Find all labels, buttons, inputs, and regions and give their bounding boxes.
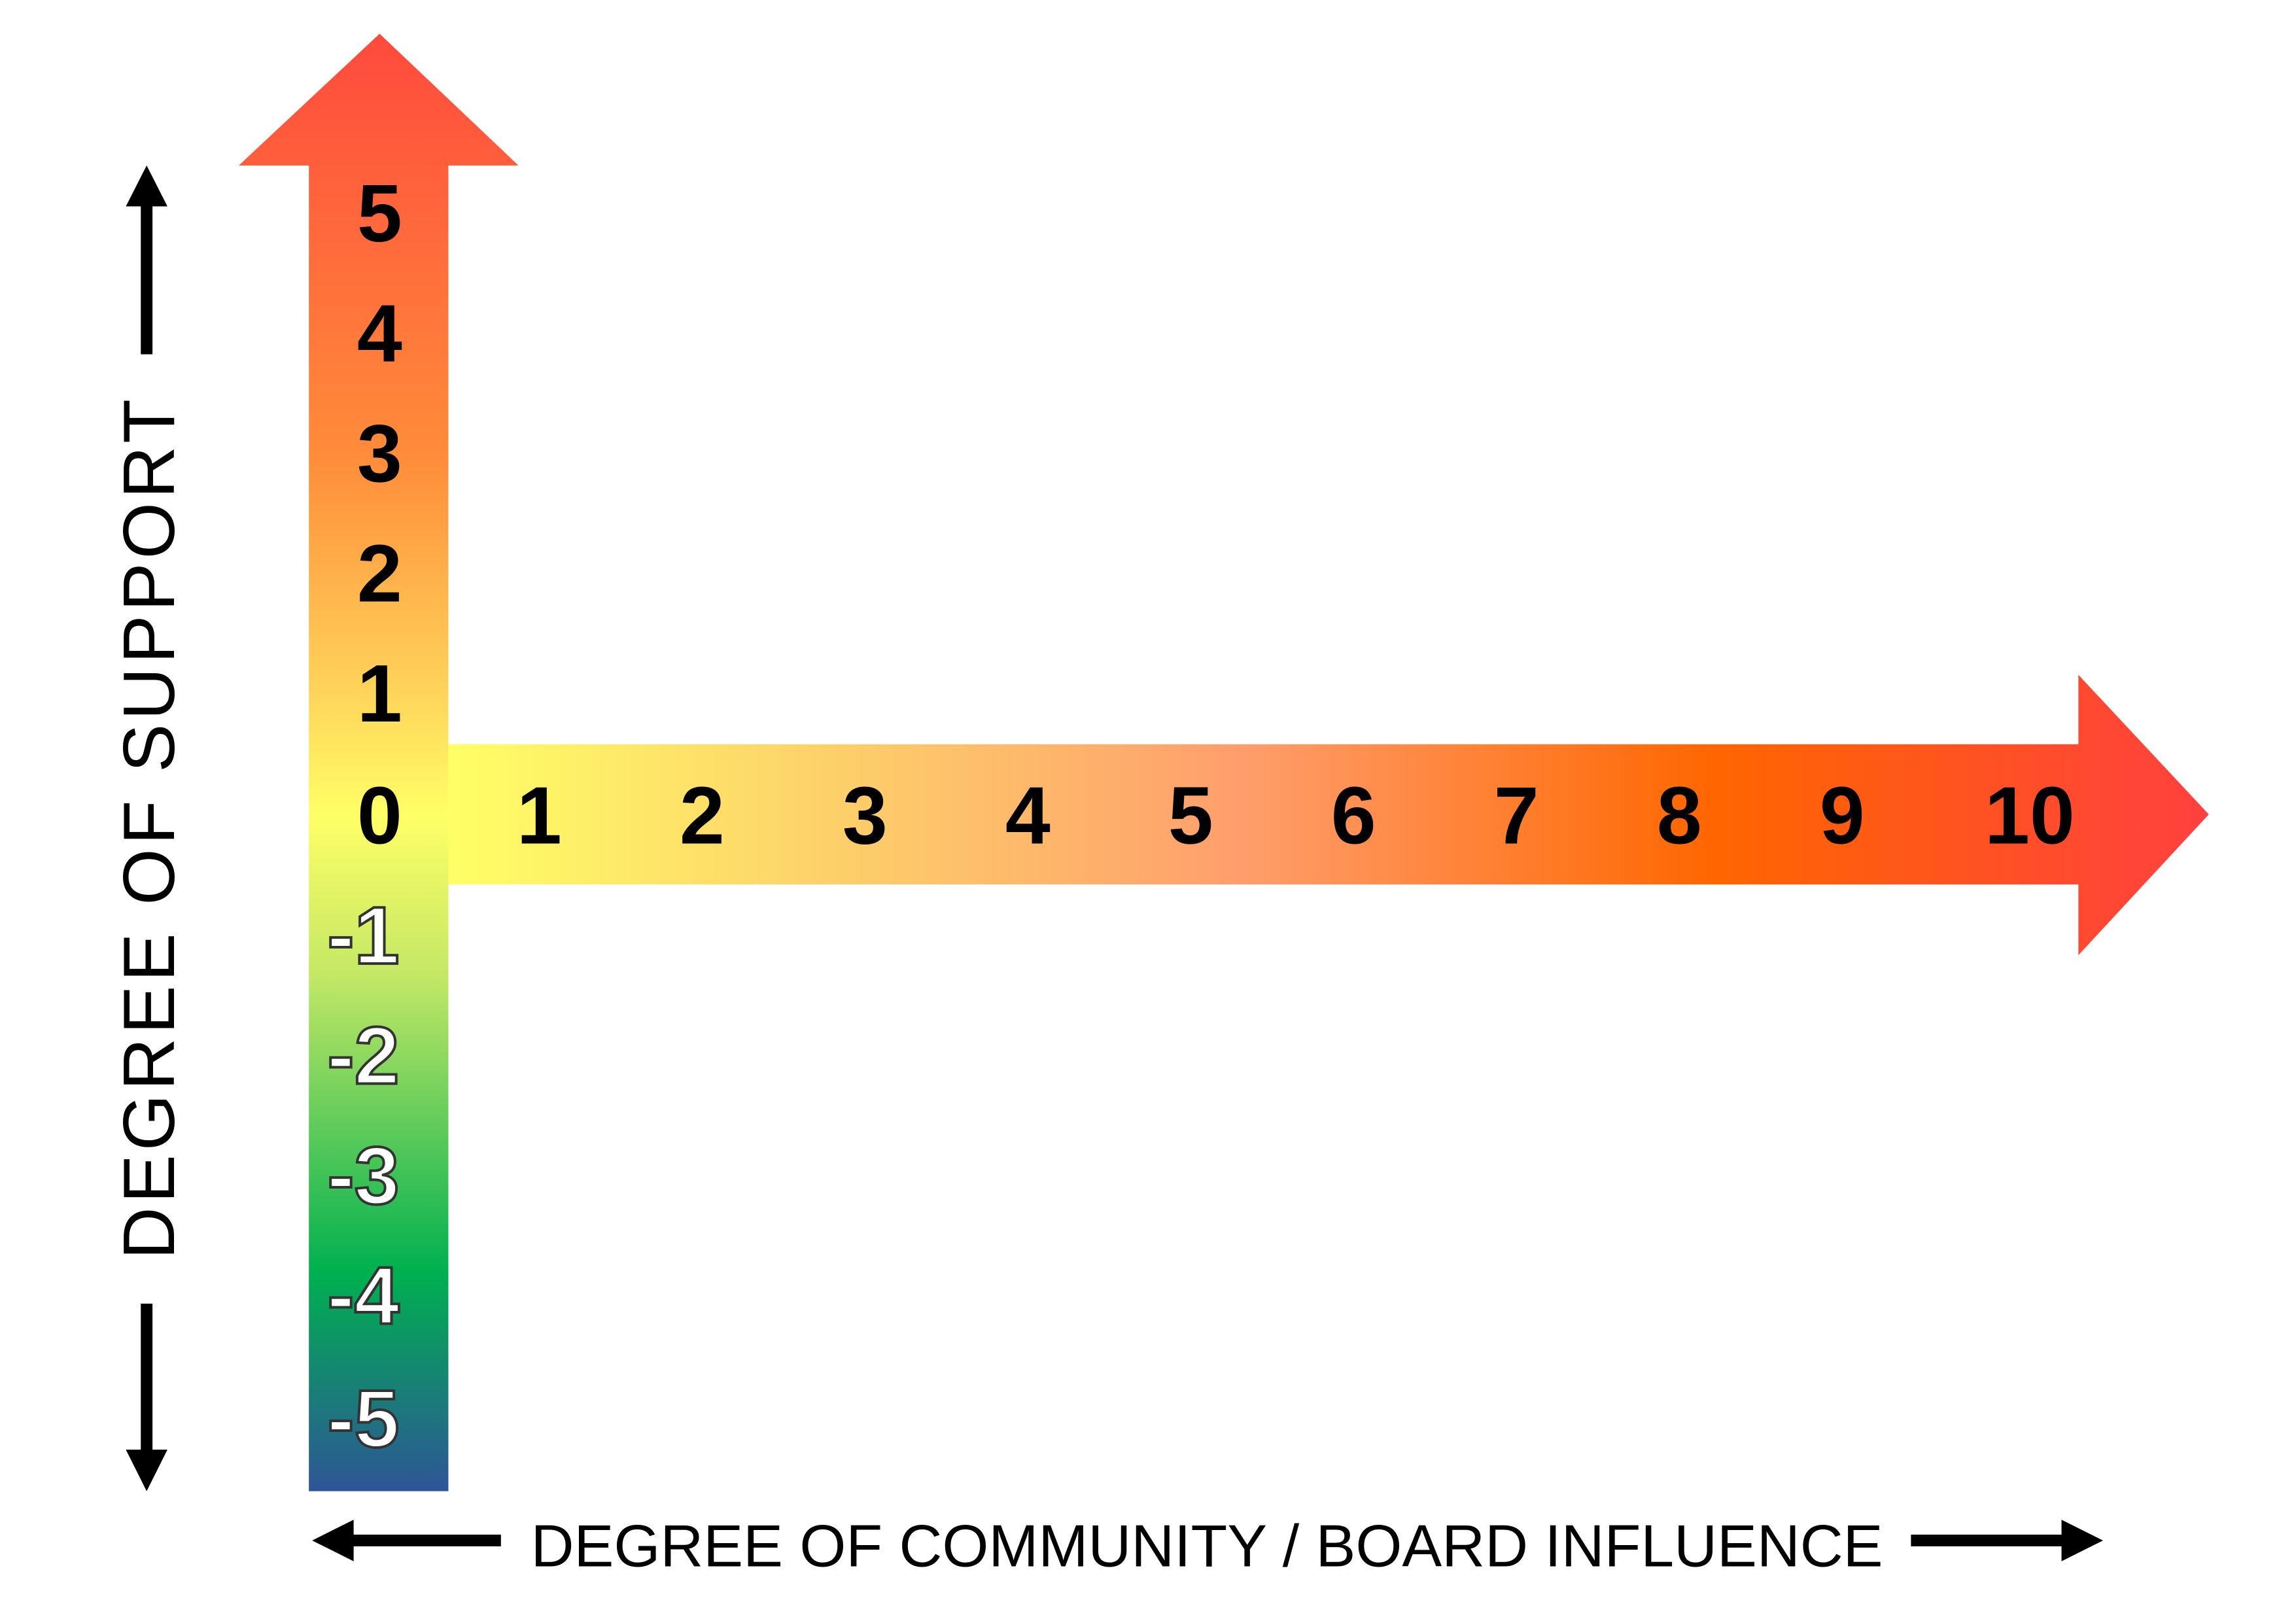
vertical scale numbers positive: 2 [357,529,402,619]
horizontal scale numbers: 2 [680,771,725,862]
vertical scale numbers negative: -2 [327,1011,400,1102]
horizontal scale numbers: 6 [1331,771,1376,862]
horizontal scale numbers: 10 [1985,771,2075,862]
y-axis label with arrows: DEGREE OF SUPPORT [108,395,190,1259]
x-axis label with arrows: DEGREE OF COMMUNITY / BOARD INFLUENCE [531,1513,1883,1580]
horizontal scale numbers: 5 [1168,771,1213,862]
vertical scale numbers negative [327,891,400,1465]
vertical scale numbers negative: -4 [327,1251,400,1342]
horizontal scale numbers [517,771,2075,862]
vertical scale numbers negative: -5 [327,1374,400,1465]
vertical arrow: support axis [239,34,519,1491]
horizontal scale numbers: 3 [843,771,888,862]
horizontal scale numbers: 7 [1494,771,1539,862]
vertical scale numbers positive: 5 [357,169,402,259]
y-axis label with arrows [108,165,190,1491]
vertical scale numbers positive: 0 [357,771,402,862]
horizontal scale numbers: 1 [517,771,562,862]
vertical scale numbers negative: -3 [327,1131,400,1221]
vertical scale numbers positive [357,169,402,862]
horizontal scale numbers: 8 [1657,771,1702,862]
vertical scale numbers negative: -1 [327,891,400,981]
horizontal scale numbers: 9 [1820,771,1865,862]
vertical scale numbers positive: 1 [357,649,402,739]
vertical scale numbers positive: 3 [357,409,402,499]
vertical scale numbers positive: 4 [357,289,402,379]
horizontal scale numbers: 4 [1005,771,1051,862]
horizontal arrow: community influence axis [448,675,2209,955]
